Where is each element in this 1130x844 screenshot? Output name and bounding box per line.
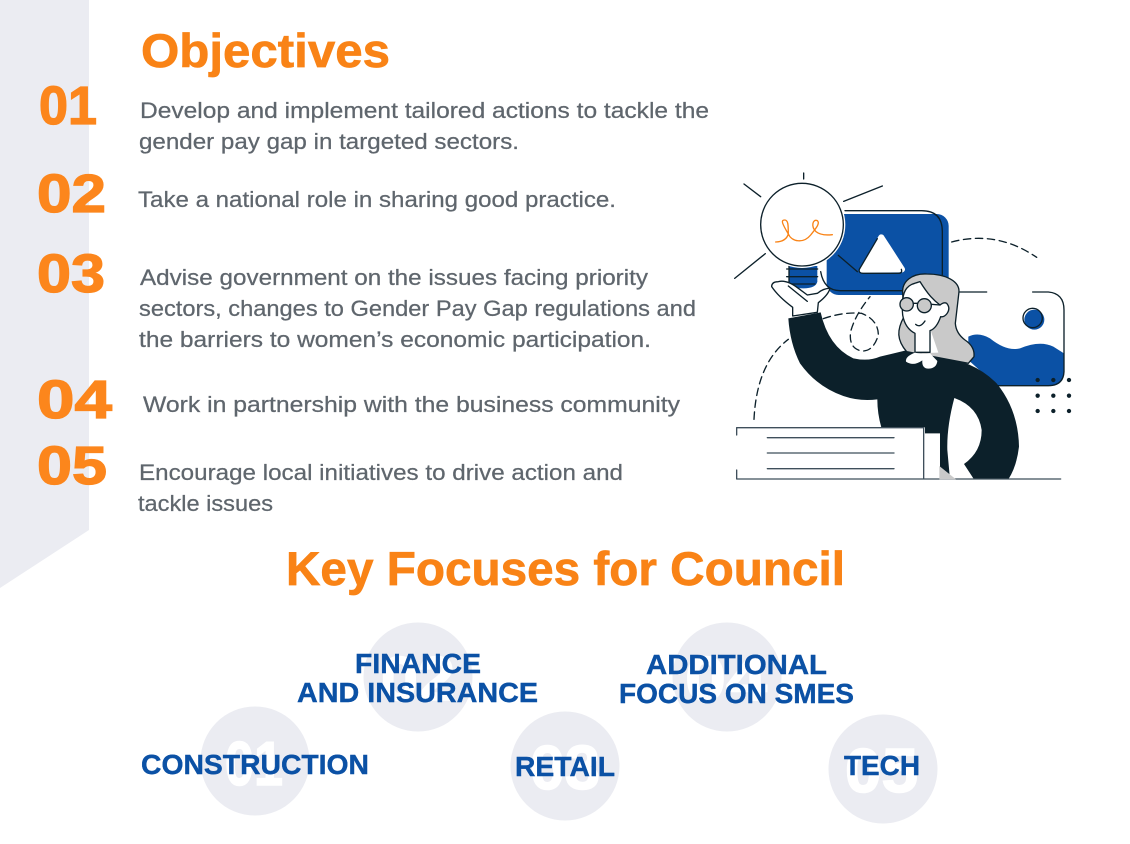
objective 04: 04 [37, 370, 112, 430]
title: Objectives: Objectives [141, 24, 390, 77]
illustration: woman holding light bulb [735, 173, 1071, 479]
dots [1035, 378, 1071, 413]
focus: construction: CONSTRUCTION [141, 749, 369, 780]
woman body [788, 312, 1019, 479]
objective 05: tackle issues [138, 491, 273, 516]
glasses [900, 298, 913, 311]
objective 03: Advise government on the issues facing priority [140, 265, 648, 290]
focus: tech: 05 [845, 737, 918, 806]
focus: additional focus on SMEs: FOCUS ON SMES [619, 678, 854, 709]
objective 04: Work in partnership with the business community [143, 392, 680, 417]
objective 05 [37, 436, 623, 516]
focus: finance and insurance [297, 622, 538, 732]
woman head [899, 274, 974, 369]
objective 03: sectors, changes to Gender Pay Gap regulations and [139, 296, 696, 321]
icon: blue video panel [821, 211, 949, 295]
objective 02: Take a national role in sharing good practice. [138, 187, 616, 212]
objective 01: Develop and implement tailored actions to tackle the [140, 98, 709, 123]
objective 02 [37, 164, 616, 224]
objective 03: the barriers to women’s economic participation. [139, 327, 651, 352]
focus: tech [828, 714, 938, 824]
objective 01: gender pay gap in targeted sectors. [139, 129, 519, 154]
objective 03: 03 [37, 244, 105, 304]
focus: finance and insurance: AND INSURANCE [297, 677, 538, 708]
objective 02: 02 [37, 164, 106, 224]
heading: Key Focuses for Council: Key Focuses for Council [286, 542, 845, 595]
dashed paths [754, 238, 1037, 419]
focus: tech: TECH [844, 750, 920, 781]
desk paper [737, 428, 1061, 479]
sidebar panel [0, 0, 89, 588]
focus: additional focus on SMEs: 04 [685, 645, 768, 714]
objective 05: Encourage local initiatives to drive action and [139, 460, 623, 485]
focus: additional focus on SMEs: ADDITIONAL [646, 649, 827, 680]
focus: construction: 01 [225, 730, 283, 799]
objective 04 [37, 370, 680, 430]
objective 01: 01 [39, 76, 97, 136]
focus: additional focus on SMEs [619, 622, 854, 732]
collar [906, 353, 937, 369]
focus: finance and insurance: 02 [381, 645, 455, 714]
focus: finance and insurance: FINANCE [355, 648, 481, 679]
hand [772, 281, 830, 316]
focus: retail: 03 [530, 734, 600, 803]
face [902, 282, 949, 352]
hair [899, 274, 974, 363]
icon: light bulb [735, 173, 882, 288]
focus: retail [510, 712, 620, 820]
objective 03 [37, 244, 696, 352]
objective 05: 05 [37, 436, 107, 496]
objective 01 [39, 76, 709, 154]
focus: construction [141, 706, 369, 816]
focus: retail: RETAIL [515, 751, 615, 782]
icon: picture frame [960, 292, 1064, 386]
